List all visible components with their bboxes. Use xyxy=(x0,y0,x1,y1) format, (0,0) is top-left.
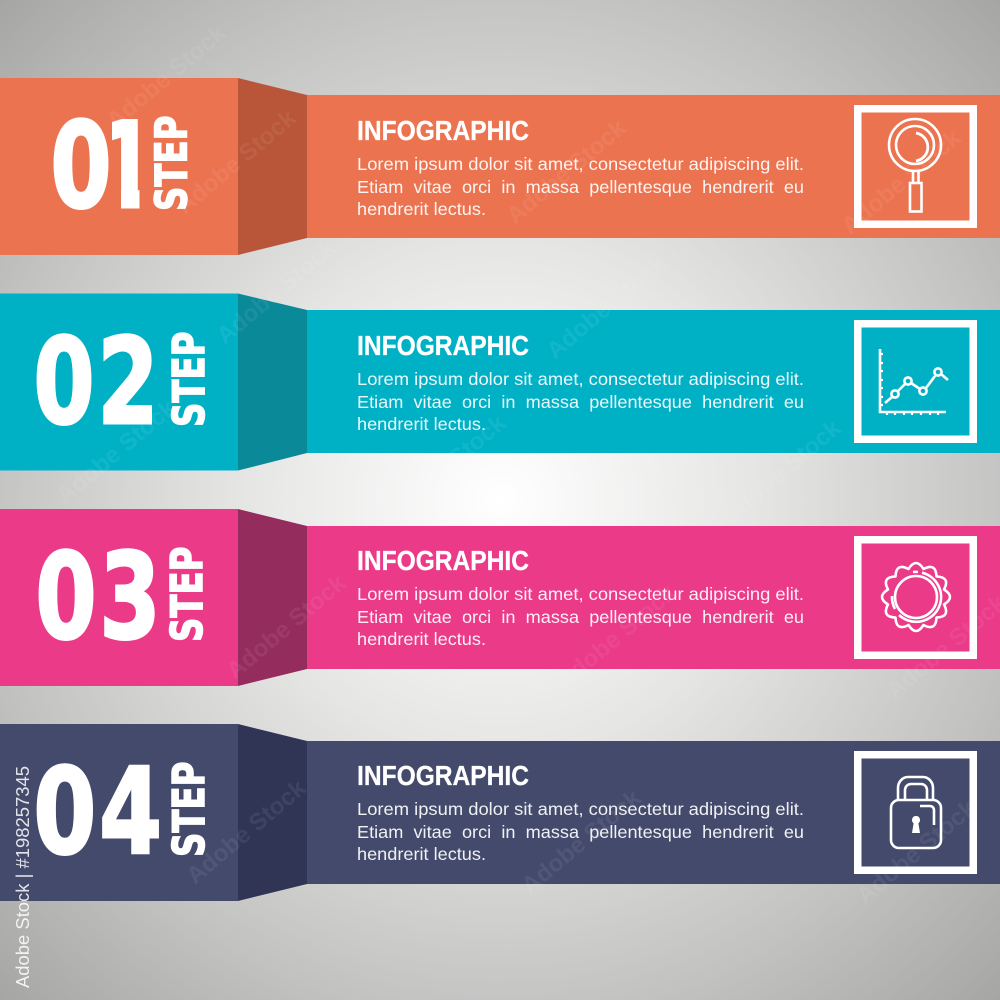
step 01 body text: Etiam vitae orci in massa pellentesque hendrerit eu xyxy=(357,177,804,197)
watermark overlay: Adobe Stock xyxy=(182,774,312,890)
step 02 body text: hendrerit lectus. xyxy=(357,414,486,434)
step 03 body text xyxy=(357,584,804,649)
step 03 body text: Lorem ipsum dolor sit amet, consectetur adipiscing elit. xyxy=(357,584,804,604)
step 04 left block xyxy=(0,724,238,901)
watermark overlay: Adobe Stock xyxy=(542,249,672,365)
step 02 fold xyxy=(238,294,307,470)
icon: magnifying glass xyxy=(889,119,941,212)
step 01 number xyxy=(54,117,140,210)
stock id caption: Adobe Stock | #198257345 xyxy=(12,766,33,988)
step 04 content band xyxy=(307,741,1000,884)
watermark overlay: Adobe Stock xyxy=(502,114,632,230)
step 01 number: 1 xyxy=(99,99,159,236)
step 03 body text: hendrerit lectus. xyxy=(357,629,486,649)
step 02 number: 02 xyxy=(34,313,161,451)
step 03 body text: Etiam vitae orci in massa pellentesque hendrerit eu xyxy=(357,607,804,627)
step 02 body text xyxy=(357,369,804,434)
step 02 content band xyxy=(307,310,1000,453)
step 01 content band xyxy=(307,95,1000,238)
watermark overlay: Adobe Stock xyxy=(52,394,182,510)
watermark overlay: Adobe Stock xyxy=(717,414,847,530)
step 03 content band xyxy=(307,526,1000,669)
step 01 body text: hendrerit lectus. xyxy=(357,199,486,219)
step 03 left block xyxy=(0,509,238,686)
watermark overlay: Adobe Stock xyxy=(382,409,512,525)
panel: step 02 xyxy=(0,294,1000,470)
panel: step 04 xyxy=(0,724,1000,901)
step 01 number: 0 xyxy=(50,97,114,235)
watermark overlay: Adobe Stock xyxy=(517,784,647,900)
step 02 body text: Etiam vitae orci in massa pellentesque hendrerit eu xyxy=(357,392,804,412)
step 03 number: 03 xyxy=(36,528,163,666)
step 04 body text xyxy=(357,799,804,864)
step 01 heading: INFOGRAPHIC xyxy=(357,115,529,146)
step 04 body text: Lorem ipsum dolor sit amet, consectetur adipiscing elit. xyxy=(357,799,804,819)
step 02 heading: INFOGRAPHIC xyxy=(357,330,529,361)
watermark overlay: Adobe Stock xyxy=(552,579,682,695)
watermark overlay: Adobe Stock xyxy=(212,234,342,350)
watermark overlay: Adobe Stock xyxy=(222,569,352,685)
step 04 icon frame xyxy=(858,755,973,870)
watermark overlay: Adobe Stock xyxy=(172,104,302,220)
step 01 icon frame xyxy=(858,109,973,224)
step 04 body text: Etiam vitae orci in massa pellentesque hendrerit eu xyxy=(357,822,804,842)
step 04 number: 04 xyxy=(34,743,165,881)
icon: padlock xyxy=(891,777,941,848)
step 02 label: STEP xyxy=(165,332,215,427)
step 04 heading: INFOGRAPHIC xyxy=(357,760,529,791)
step 04 fold xyxy=(238,724,307,901)
panel: step 03 xyxy=(0,509,1000,686)
watermark overlay: Adobe Stock xyxy=(852,794,982,910)
step 04 body text: hendrerit lectus. xyxy=(357,844,486,864)
watermark overlay: Adobe Stock xyxy=(837,124,967,240)
step 03 heading: INFOGRAPHIC xyxy=(357,545,529,576)
step 01 label: STEP xyxy=(147,116,198,211)
panel: step 01 xyxy=(0,78,1000,255)
icon: gear xyxy=(882,563,950,631)
step 03 icon frame xyxy=(858,540,973,655)
step 01 body text xyxy=(357,154,804,219)
icon: line chart xyxy=(880,349,948,415)
step 01 body text: Lorem ipsum dolor sit amet, consectetur adipiscing elit. xyxy=(357,154,804,174)
watermark overlay: Adobe Stock xyxy=(102,19,232,135)
step 01 fold xyxy=(238,78,307,255)
step 03 fold xyxy=(238,509,307,686)
step 02 left block xyxy=(0,294,238,470)
step 03 label: STEP xyxy=(163,547,213,642)
step 02 icon frame xyxy=(858,324,973,439)
step 01 left block xyxy=(0,78,238,255)
step 02 body text: Lorem ipsum dolor sit amet, consectetur adipiscing elit. xyxy=(357,369,804,389)
step 04 label: STEP xyxy=(165,762,215,857)
